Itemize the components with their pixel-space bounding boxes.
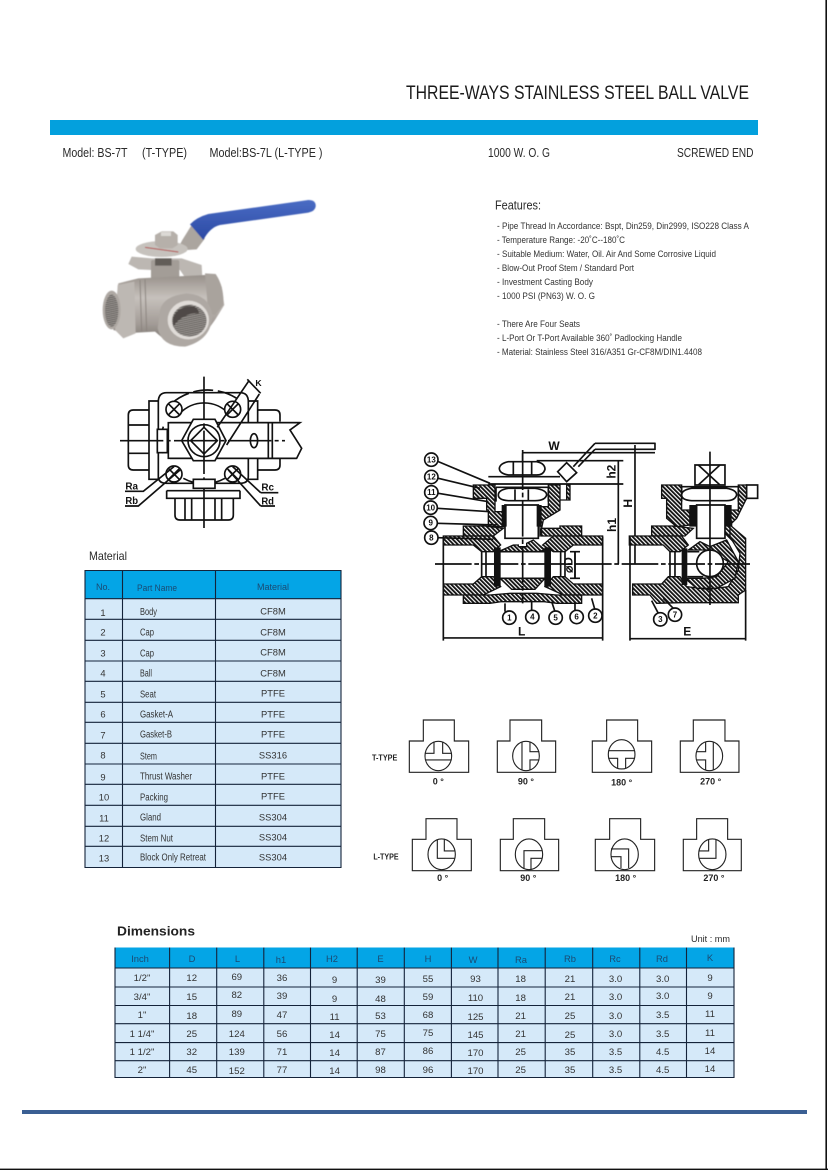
- dimensions table rows: 87: [375, 1047, 386, 1058]
- dimensions table rows: 89: [231, 1009, 242, 1020]
- material table header: No.: [96, 582, 110, 592]
- dimensions table rows: 3.0: [656, 974, 669, 985]
- center lines: [435, 453, 750, 603]
- dimension labels: E: [683, 624, 691, 638]
- flow diagrams: [372, 720, 741, 883]
- section drawing: side views: [424, 439, 758, 641]
- dimensions table rows: 12: [186, 973, 197, 984]
- features list: - Blow-Out Proof Stem / Standard Port: [497, 263, 634, 274]
- dimensions table rows: 14: [329, 1048, 341, 1059]
- part number balloons: 8: [429, 533, 434, 542]
- dimensions table rows: 75: [375, 1029, 386, 1040]
- footer bar: [22, 1110, 807, 1114]
- features list: - Investment Casting Body: [497, 277, 593, 288]
- dimension labels: ⌀D: [562, 557, 576, 573]
- material table rows: PTFE: [261, 770, 285, 782]
- model and rating line: [62, 146, 754, 160]
- part number balloons: 3: [658, 615, 663, 624]
- dimensions table rows: 9: [332, 994, 337, 1005]
- dimensions table rows: 47: [277, 1010, 287, 1021]
- T-type row: 0 °: [433, 777, 444, 787]
- material table rows: Seat: [140, 690, 156, 700]
- features list: [495, 198, 750, 358]
- dimensions table header: [131, 952, 714, 965]
- dimensions table rows: 3.5: [609, 1047, 622, 1058]
- L-type row: [373, 819, 741, 883]
- left view body: [443, 485, 603, 603]
- dimension labels: h2: [604, 464, 618, 479]
- T-type row: T-TYPE: [372, 753, 398, 762]
- top view drawing: Rb: [125, 496, 138, 507]
- dimensions table rows: 145: [467, 1030, 484, 1041]
- features list: Features:: [495, 198, 541, 212]
- material table rows: PTFE: [261, 790, 285, 802]
- dimensions table rows: 11: [330, 1012, 340, 1023]
- dimensions heading: Dimensions: [117, 924, 195, 938]
- features list: - L-Port Or T-Port Available 360˚ Padlocking Handle: [497, 333, 682, 344]
- dimension labels: W: [548, 439, 560, 453]
- material table rows: PTFE: [261, 728, 285, 740]
- material table header: Part Name: [137, 583, 177, 593]
- dimensions table rows: 39: [277, 991, 287, 1002]
- part number balloons: 2: [593, 611, 598, 620]
- part number balloons: 9: [428, 519, 433, 528]
- dimensions table rows: 170: [467, 1066, 484, 1077]
- L-type row: L-TYPE: [373, 853, 399, 862]
- dimensions table rows: 21: [515, 1011, 526, 1022]
- dimensions table rows: 21: [565, 974, 575, 985]
- dimensions table rows: 45: [186, 1065, 197, 1076]
- features list: - Pipe Thread In Accordance: Bspt, Din259, Din2999, ISO228 Class A: [497, 221, 750, 232]
- dimensions table rows: 14: [329, 1030, 341, 1041]
- dimensions table rows: 14: [705, 1046, 716, 1057]
- L-type row: 270 °: [703, 873, 725, 883]
- material table rows: 4: [100, 668, 106, 678]
- model and rating line: 1000 W. O. G: [488, 146, 550, 160]
- dimensions table header: W: [469, 954, 478, 965]
- material table header: [96, 582, 289, 593]
- dimensions table rows: 3/4": [134, 992, 150, 1003]
- dimensions table rows: 75: [423, 1028, 433, 1039]
- dimensions table rows: 18: [186, 1011, 197, 1022]
- dimensions table header: Rc: [609, 953, 621, 964]
- dimensions table header: H2: [326, 953, 338, 964]
- right view body: [629, 452, 758, 605]
- dimensions table rows: 25: [186, 1029, 197, 1040]
- dimensions table rows: 9: [332, 975, 337, 986]
- dimensions table rows: 21: [565, 992, 575, 1003]
- dimension labels: L: [518, 624, 525, 638]
- T-type row: 90 °: [518, 777, 534, 787]
- material table rows: 8: [100, 750, 106, 760]
- dimensions table rows: 56: [277, 1029, 287, 1040]
- model and rating line: (T-TYPE): [142, 146, 187, 160]
- dimensions table rows: 68: [423, 1010, 433, 1021]
- features list: - 1000 PSI (PN63) W. O. G: [497, 291, 595, 302]
- model and rating line: Model: BS-7T: [62, 146, 128, 160]
- dimensions table rows: 170: [467, 1048, 484, 1059]
- L-type row: 180 °: [615, 873, 637, 883]
- features list: - Material: Stainless Steel 316/A351 Gr-CF8M/DIN1.4408: [497, 347, 702, 358]
- unit note: Unit : mm: [691, 934, 730, 945]
- dimensions table rows: 1": [138, 1010, 146, 1021]
- dimension labels: h1: [605, 518, 619, 532]
- dimensions table header: E: [377, 953, 384, 964]
- dimensions table rows: 15: [186, 992, 197, 1003]
- material table rows: CF8M: [260, 668, 286, 678]
- dimensions table rows: 39: [375, 975, 386, 986]
- dimensions table rows: 18: [515, 974, 526, 985]
- material table rows: PTFE: [261, 688, 285, 698]
- material heading: Material: [89, 549, 127, 563]
- dimensions table header: K: [707, 952, 714, 963]
- material table rows: 13: [99, 852, 109, 864]
- dimensions table rows: 71: [277, 1047, 287, 1058]
- material table rows: Ball: [140, 668, 152, 680]
- dimensions table rows: 124: [229, 1029, 245, 1040]
- dimensions table rows: 152: [229, 1066, 245, 1077]
- material table rows: 6: [100, 708, 106, 720]
- dimensions table rows: 25: [515, 1065, 526, 1076]
- handle and dimensions: [488, 443, 655, 564]
- dimensions table rows: 4.5: [656, 1065, 669, 1076]
- dimensions table rows: 11: [705, 1028, 715, 1039]
- dimensions table rows: 32: [186, 1047, 197, 1058]
- part number balloons: 12: [427, 473, 436, 482]
- dimensions table header: Rb: [564, 953, 576, 964]
- L-type row: 0 °: [437, 873, 449, 883]
- dimensions table rows: 82: [231, 990, 242, 1001]
- material table rows: 10: [99, 792, 109, 802]
- material table rows: 3: [100, 648, 106, 658]
- dimensions table rows: 110: [468, 993, 483, 1004]
- material table rows: Stem Nut: [140, 834, 173, 844]
- dimensions table rows: 77: [277, 1065, 287, 1076]
- dimensions table rows: 1/2": [134, 973, 150, 984]
- dimensions table rows: 25: [565, 1011, 575, 1022]
- material table rows: 2: [100, 626, 106, 638]
- dimensions table rows: 3.5: [609, 1065, 622, 1076]
- part number balloons: 10: [426, 503, 436, 512]
- material table rows: [99, 606, 287, 864]
- dimensions table header: Ra: [515, 954, 528, 965]
- title: THREE-WAYS STAINLESS STEEL BALL VALVE: [406, 83, 749, 104]
- material table rows: Gland: [140, 812, 161, 824]
- features list: - Suitable Medium: Water, Oil. Air And Some Corrosive Liquid: [497, 249, 716, 260]
- dimensions table rows: [130, 972, 716, 1077]
- dimensions table rows: 55: [423, 974, 433, 985]
- dimensions table rows: 9: [707, 991, 713, 1002]
- material table rows: CF8M: [260, 646, 286, 658]
- material table rows: 5: [100, 688, 106, 700]
- dimensions table rows: 3.0: [609, 1029, 622, 1040]
- material table rows: PTFE: [261, 708, 285, 720]
- dimensions table rows: 3.0: [609, 992, 622, 1003]
- T-type row: 270 °: [700, 777, 722, 787]
- dimensions table header: h1: [276, 954, 286, 965]
- material table header: Material: [257, 582, 289, 592]
- dimensions table rows: 48: [375, 994, 386, 1005]
- dimensions table rows: 14: [329, 1066, 341, 1077]
- material table rows: 7: [100, 730, 106, 740]
- dimensions table header: H: [425, 953, 431, 964]
- dimensions table rows: 53: [375, 1011, 386, 1022]
- material table rows: Cap: [140, 648, 154, 660]
- material table rows: CF8M: [260, 606, 286, 616]
- T-type row: 180 °: [611, 777, 633, 787]
- dimensions table rows: 3.5: [656, 1029, 669, 1040]
- material table rows: 9: [100, 772, 106, 782]
- dimensions table rows: 125: [467, 1012, 484, 1023]
- features list: - There Are Four Seats: [497, 319, 580, 330]
- material table rows: SS304: [259, 852, 287, 862]
- material table rows: Gasket-B: [140, 730, 172, 740]
- leader lines and dimension lines: [437, 462, 746, 641]
- dimensions table rows: 1 1/4": [130, 1029, 154, 1040]
- material table rows: SS316: [259, 750, 287, 760]
- dimensions table header: D: [189, 953, 196, 964]
- dimensions table rows: 139: [229, 1047, 245, 1058]
- dimensions table rows: 93: [470, 974, 481, 985]
- dimensions table rows: 18: [515, 993, 526, 1004]
- dimensions table rows: 98: [375, 1065, 386, 1076]
- material table rows: Gasket-A: [140, 710, 173, 720]
- T-type row: [372, 720, 739, 787]
- top view drawing: Ra: [125, 481, 138, 492]
- model and rating line: Model:BS-7L (L-TYPE ): [210, 146, 322, 160]
- dimensions table rows: 35: [565, 1065, 575, 1076]
- dimensions table header: L: [235, 953, 240, 964]
- material table rows: Thrust Washer: [140, 772, 193, 782]
- dimensions table rows: 2": [138, 1065, 146, 1076]
- part number balloons: 13: [427, 455, 436, 464]
- part number balloons: 6: [574, 613, 579, 622]
- model and rating line: SCREWED END: [677, 146, 754, 160]
- dimensions table rows: 25: [565, 1030, 575, 1041]
- material table rows: Packing: [140, 792, 168, 804]
- material table rows: SS304: [259, 812, 287, 822]
- dimensions table rows: 9: [707, 973, 713, 984]
- dimensions table rows: 14: [705, 1064, 716, 1075]
- dimensions table rows: 3.0: [609, 974, 622, 985]
- part number balloons: 5: [553, 613, 558, 622]
- L-type row: 90 °: [520, 873, 537, 883]
- part number balloons: [424, 453, 682, 626]
- features list: - Temperature Range: -20˚C--180˚C: [497, 235, 625, 246]
- top view drawing: Rc: [261, 483, 274, 494]
- part number balloons: 4: [530, 613, 535, 622]
- material table rows: CF8M: [260, 626, 286, 638]
- top view drawing: K: [255, 378, 262, 388]
- dimensions table: [115, 948, 734, 1078]
- part number balloons: 1: [507, 613, 512, 622]
- dimensions table rows: 21: [515, 1029, 526, 1040]
- dimensions table rows: 36: [277, 973, 287, 984]
- dimensions table rows: 96: [423, 1065, 433, 1076]
- top view drawing: Rd: [261, 496, 274, 507]
- material table rows: Stem: [140, 752, 157, 762]
- dimensions table rows: 1 1/2": [130, 1047, 154, 1058]
- header bar: [50, 120, 758, 135]
- dimension labels: [518, 439, 691, 638]
- dimensions table rows: 3.0: [609, 1011, 622, 1022]
- top view drawing: [120, 377, 302, 530]
- material table: [85, 570, 341, 868]
- dimensions table rows: 4.5: [656, 1047, 669, 1058]
- material table rows: 11: [99, 812, 109, 824]
- dimensions table header: Inch: [131, 953, 149, 964]
- dimensions table rows: 11: [705, 1009, 715, 1020]
- part number balloons: 11: [427, 488, 436, 497]
- material table rows: 12: [99, 832, 109, 844]
- dimensions table rows: 86: [423, 1046, 433, 1057]
- material table rows: Cap: [140, 628, 154, 638]
- dimensions table rows: 69: [231, 972, 242, 983]
- dimensions table rows: 25: [515, 1047, 526, 1058]
- dimensions table rows: 59: [423, 992, 433, 1003]
- dimensions table rows: 3.5: [656, 1010, 669, 1021]
- dimension labels: H: [621, 499, 635, 508]
- valve photo: [103, 200, 316, 347]
- material table rows: Block Only Retreat: [140, 852, 206, 864]
- dimensions table header: Rd: [656, 953, 668, 964]
- dimensions table rows: 3.0: [656, 991, 669, 1002]
- dimensions table rows: 35: [565, 1047, 575, 1058]
- part number balloons: 7: [673, 610, 678, 619]
- material table rows: 1: [100, 607, 106, 618]
- material table rows: Body: [140, 607, 157, 618]
- material table rows: SS304: [259, 832, 287, 842]
